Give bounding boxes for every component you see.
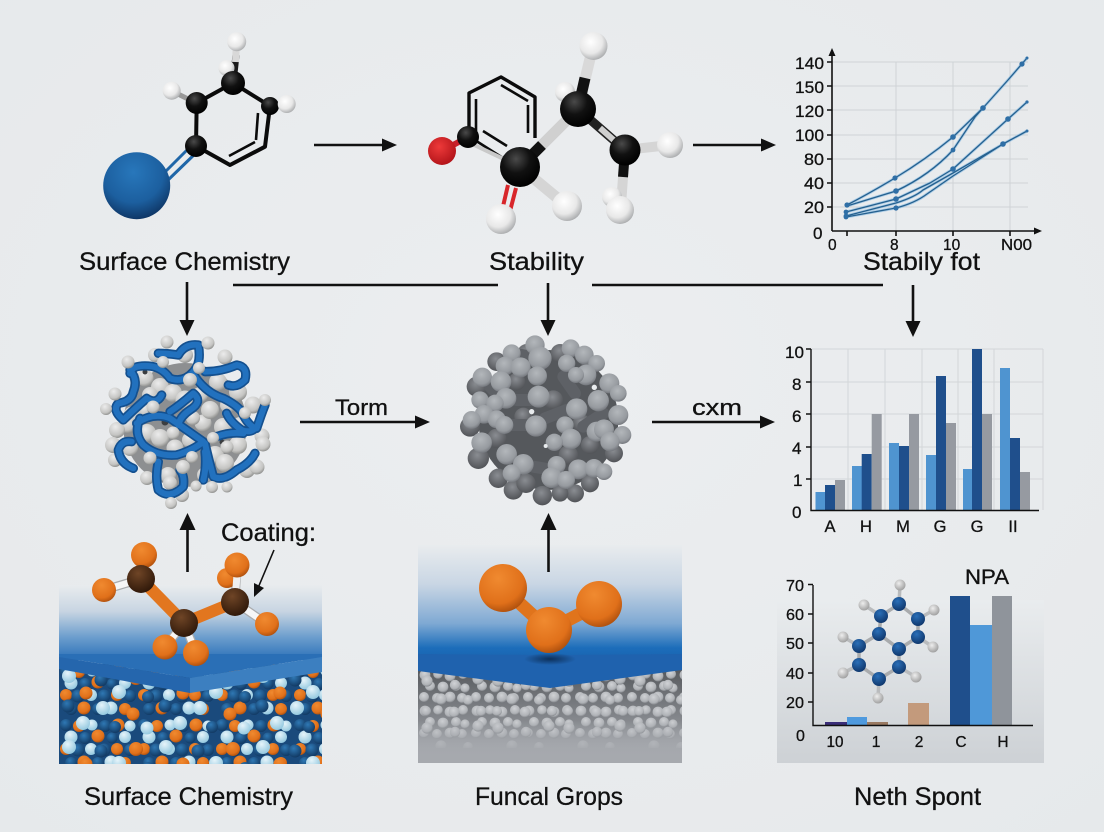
npa y labels: 0 <box>796 728 805 745</box>
arrow: to line chart <box>693 138 776 152</box>
heading: surface chemistry (bottom): Surface Chemistry <box>84 783 293 811</box>
chart x-axis labels: 8 <box>890 237 899 254</box>
bar chart y labels: 1 <box>793 471 802 490</box>
bar chart y labels: 8 <box>792 375 801 394</box>
heading: neth spont: Neth Spont <box>854 783 981 811</box>
arrow: down left <box>180 282 194 336</box>
label: cxm: cxm <box>692 395 742 420</box>
bar chart y labels: 6 <box>792 407 801 426</box>
chart markers <box>844 56 1029 219</box>
chart grid <box>832 62 1028 231</box>
arrow: to stability molecule <box>314 138 397 152</box>
gray bed <box>418 668 682 763</box>
npa x labels: 2 <box>915 734 923 751</box>
arrow: up centre <box>540 513 556 572</box>
npa y labels: 50 <box>786 636 804 653</box>
bar chart x labels: II <box>1008 518 1018 536</box>
blue strands <box>116 345 265 494</box>
bar chart x labels: A <box>824 518 836 536</box>
back beads <box>460 344 623 505</box>
bar chart x labels: H <box>860 518 872 536</box>
chart y-axis labels: 150 <box>795 78 824 97</box>
gray nanoparticle cluster <box>460 335 631 505</box>
npa y labels: 40 <box>786 666 804 683</box>
bar chart x labels <box>824 518 1018 536</box>
bar chart x labels: M <box>896 518 910 536</box>
bar chart grid <box>811 349 1043 510</box>
npa bars <box>825 596 1012 726</box>
chart y-axis labels <box>795 54 824 243</box>
heading: stabily fot: Stabily fot <box>863 248 980 276</box>
npa x labels <box>826 734 1009 751</box>
bars: group G second <box>963 349 992 510</box>
front beads <box>100 336 271 509</box>
panel: functional groups on gray particles <box>418 545 682 763</box>
bar chart axes <box>806 349 1039 510</box>
dark rods <box>490 355 603 470</box>
molecule: stability <box>428 32 683 234</box>
chart x-axis labels: N00 <box>1001 237 1032 254</box>
back beads <box>105 347 270 502</box>
chart x-axis labels: 10 <box>943 237 961 254</box>
blue plate <box>418 654 682 688</box>
arrow: torm <box>300 416 430 428</box>
npa x labels: C <box>955 734 967 751</box>
core shading <box>123 363 247 487</box>
gradient band <box>418 545 682 657</box>
chart axes <box>827 48 1042 236</box>
arrow: cxm <box>652 416 775 428</box>
npa x labels: 10 <box>826 734 844 751</box>
connector line right <box>592 284 883 286</box>
label: coating: Coating: <box>221 519 316 547</box>
molecule shadow <box>524 653 576 665</box>
arrow: down right <box>906 285 920 337</box>
bar chart x labels: G <box>971 518 983 536</box>
npa y labels: 60 <box>786 607 804 624</box>
blue plate <box>59 654 322 693</box>
bar chart x labels: G <box>934 518 946 536</box>
chart y-axis labels: 20 <box>804 198 824 217</box>
cluster core <box>478 350 618 490</box>
chart y-axis labels: 140 <box>795 54 824 73</box>
particle bed <box>59 664 322 764</box>
chart x-axis labels <box>828 237 1032 254</box>
chart lines <box>846 58 1027 217</box>
orange molecule <box>479 564 622 653</box>
front beads <box>463 335 631 489</box>
chart y-axis labels: 0 <box>813 224 822 243</box>
orange molecule <box>92 542 279 666</box>
chart y-axis labels: 80 <box>804 150 824 169</box>
npa x labels: H <box>997 734 1009 751</box>
bar chart y labels: 4 <box>792 439 801 458</box>
bar chart y labels: 0 <box>792 503 801 522</box>
npa y labels: 20 <box>786 695 804 712</box>
bar chart y labels <box>785 343 804 522</box>
bar chart <box>785 343 1043 536</box>
line chart <box>795 48 1042 254</box>
npa y labels <box>786 578 805 745</box>
panel: coating layer on mixed particles <box>59 542 322 764</box>
molecule: naphthalene <box>838 580 940 704</box>
npa axes <box>808 584 1033 726</box>
heading: funcal grops: Funcal Grops <box>475 783 623 811</box>
connector line left <box>233 284 498 286</box>
dark crevices <box>142 370 224 444</box>
bars: group A <box>816 480 845 510</box>
arrow: coating pointer <box>254 550 274 597</box>
heading: stability: Stability <box>489 248 585 276</box>
panel: npa bar chart with molecule <box>777 566 1044 763</box>
label: torm: Torm <box>335 395 388 420</box>
polymer nanoparticle with blue strands and white beads <box>100 336 271 509</box>
chart y-axis labels: 40 <box>804 174 824 193</box>
bar chart y labels: 10 <box>785 343 804 362</box>
gradient band <box>59 585 322 660</box>
chart y-axis labels: 100 <box>795 126 824 145</box>
npa x labels: 1 <box>872 734 880 751</box>
molecule: surface chemistry benzene with blue sphere <box>103 32 296 219</box>
npa y labels: 70 <box>786 578 804 595</box>
gaps of light <box>529 385 597 448</box>
arrow: up left <box>180 513 196 572</box>
bars: group II <box>1000 368 1030 510</box>
npa title: NPA <box>965 566 1009 589</box>
panel background <box>777 600 1044 763</box>
heading: surface chemistry (top): Surface Chemistry <box>79 248 291 276</box>
bars: group M <box>889 414 919 510</box>
chart x-axis labels: 0 <box>828 237 837 254</box>
bars: group G <box>926 376 956 510</box>
arrow: down centre <box>540 283 556 336</box>
chart y-axis labels: 120 <box>795 102 824 121</box>
bars: group H <box>852 414 882 510</box>
